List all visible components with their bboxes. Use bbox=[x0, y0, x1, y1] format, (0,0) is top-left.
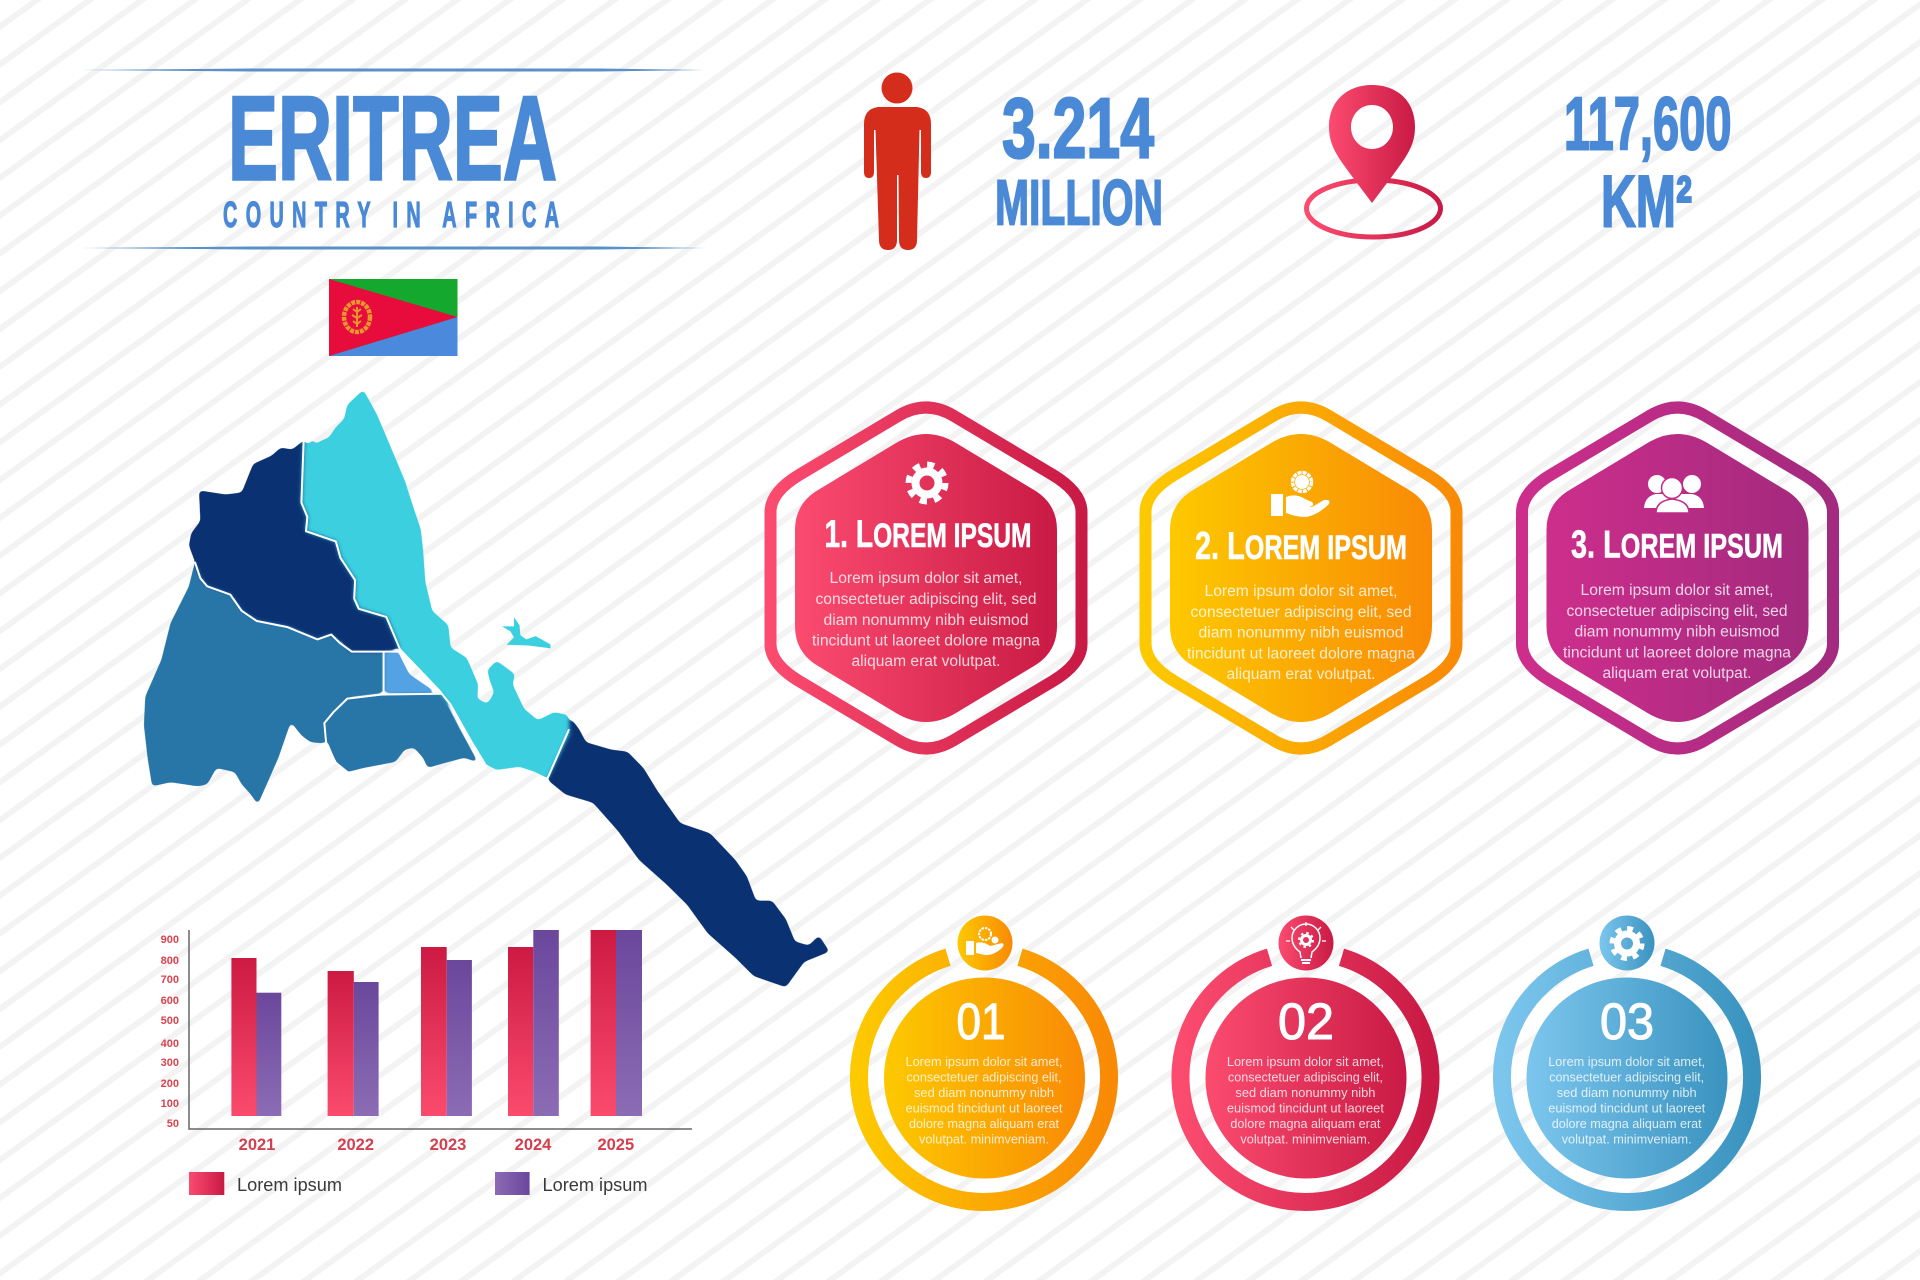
body text: dolore magna aliquam erat bbox=[1230, 1116, 1381, 1131]
body text: aliquam erat volutpat. bbox=[852, 653, 1000, 670]
body text: consectetuer adipiscing elit, bbox=[1549, 1070, 1704, 1084]
icon: light bulb bbox=[1286, 922, 1326, 963]
body text: consectetuer adipiscing elit, bbox=[906, 1070, 1062, 1084]
body text: Lorem ipsum dolor sit amet, bbox=[1227, 1054, 1384, 1069]
panel: hexagon 3 bbox=[1522, 408, 1833, 748]
y axis labels: 500 bbox=[161, 1015, 179, 1027]
region: southern red sea bbox=[548, 717, 829, 987]
body text: volutpat. minimveniam. bbox=[1240, 1132, 1370, 1146]
body text: euismod tincidunt ut laoreet bbox=[1548, 1100, 1706, 1116]
heading: Eritrea: ERITREA bbox=[228, 72, 557, 206]
y axis labels: 800 bbox=[161, 955, 179, 967]
region: gash barka bbox=[144, 562, 383, 805]
region: debub bbox=[325, 695, 478, 772]
x axis labels: 2023 bbox=[430, 1136, 466, 1154]
population stat: 3.214 bbox=[1002, 82, 1154, 176]
bar chart bbox=[161, 930, 692, 1195]
x axis labels bbox=[239, 1136, 634, 1154]
heading: 3. LOREM IPSUM bbox=[1571, 524, 1783, 567]
bars bbox=[231, 930, 642, 1116]
y axis labels bbox=[161, 934, 179, 1130]
area stat: 117,600 bbox=[1564, 82, 1732, 166]
x axis labels: 2021 bbox=[239, 1136, 275, 1154]
region: anseba bbox=[189, 440, 399, 651]
body text: diam nonummy nibh euismod bbox=[1198, 625, 1404, 642]
body text: diam nonummy nibh euismod bbox=[1574, 624, 1780, 641]
body text: diam nonummy nibh euismod bbox=[824, 612, 1028, 629]
region: island bbox=[502, 617, 551, 648]
body text: Lorem ipsum dolor sit amet, bbox=[830, 570, 1022, 587]
legend bbox=[189, 1172, 648, 1195]
map fills bbox=[144, 390, 829, 987]
icon: person bbox=[864, 72, 931, 250]
y axis labels: 900 bbox=[161, 934, 179, 946]
body text: aliquam erat volutpat. bbox=[1226, 666, 1376, 683]
x axis labels: 2025 bbox=[597, 1136, 634, 1154]
population stat bbox=[995, 82, 1163, 238]
body text: sed diam nonummy nibh bbox=[1235, 1085, 1375, 1100]
panel: hexagon 2 bbox=[1146, 408, 1456, 748]
body text: euismod tincidunt ut laoreet bbox=[906, 1100, 1063, 1116]
body text: tincidunt ut laoreet dolore magna bbox=[1563, 644, 1791, 661]
body text bbox=[812, 570, 1040, 670]
body text bbox=[1187, 583, 1415, 683]
y axis labels: 50 bbox=[167, 1118, 179, 1130]
body text bbox=[1563, 582, 1791, 682]
population stat: MILLION bbox=[995, 166, 1163, 238]
icon: map pin bbox=[1306, 85, 1440, 237]
region borders bbox=[195, 440, 569, 779]
body text: consectetuer adipiscing elit, sed bbox=[816, 591, 1036, 608]
number: 01 bbox=[956, 993, 1006, 1050]
body text: tincidunt ut laoreet dolore magna bbox=[1187, 645, 1415, 662]
body text: Lorem ipsum dolor sit amet, bbox=[1580, 582, 1774, 599]
body text: Lorem ipsum dolor sit amet, bbox=[906, 1054, 1062, 1069]
body text: euismod tincidunt ut laoreet bbox=[1227, 1100, 1384, 1116]
body text: volutpat. minimveniam. bbox=[919, 1132, 1049, 1146]
number: 02 bbox=[1278, 993, 1334, 1050]
body text: Lorem ipsum dolor sit amet, bbox=[1548, 1054, 1705, 1069]
heading: 2. LOREM IPSUM bbox=[1195, 525, 1407, 568]
icon: hand with flower bbox=[1271, 472, 1329, 517]
legend: Lorem ipsum bbox=[542, 1175, 648, 1195]
x axis labels: 2022 bbox=[337, 1136, 374, 1154]
body text: dolore magna aliquam erat bbox=[909, 1116, 1059, 1131]
y axis labels: 600 bbox=[161, 995, 179, 1007]
map of Eritrea bbox=[144, 390, 829, 987]
body text bbox=[1548, 1054, 1706, 1146]
heading: 1. LOREM IPSUM bbox=[824, 513, 1032, 556]
panel: circle 02 bbox=[1180, 916, 1430, 1202]
area stat: KM² bbox=[1601, 162, 1692, 242]
region: north red sea bbox=[301, 390, 569, 778]
body text: consectetuer adipiscing elit, sed bbox=[1190, 604, 1412, 621]
icon: gear bbox=[908, 464, 946, 502]
panel: hexagon 1 bbox=[770, 408, 1082, 748]
panel: circle 01 bbox=[859, 916, 1109, 1202]
number: 03 bbox=[1600, 993, 1654, 1050]
body text: sed diam nonummy nibh bbox=[914, 1085, 1054, 1100]
legend: Lorem ipsum bbox=[237, 1175, 342, 1195]
title block bbox=[80, 68, 705, 250]
y axis labels: 200 bbox=[161, 1078, 179, 1090]
icon: hand with gears bbox=[966, 928, 1004, 955]
y axis labels: 100 bbox=[161, 1098, 179, 1110]
body text: tincidunt ut laoreet dolore magna bbox=[812, 632, 1040, 650]
panel: circle 03 bbox=[1502, 916, 1752, 1202]
body text: consectetuer adipiscing elit, sed bbox=[1566, 603, 1788, 620]
subheading: COUNTRY IN AFRICA bbox=[223, 196, 559, 236]
icon: people bbox=[1644, 475, 1704, 513]
body text: Lorem ipsum dolor sit amet, bbox=[1204, 583, 1398, 600]
body text bbox=[1227, 1054, 1384, 1146]
body text: volutpat. minimveniam. bbox=[1562, 1132, 1692, 1146]
area stat bbox=[1564, 82, 1732, 242]
body text: consectetuer adipiscing elit, bbox=[1228, 1070, 1383, 1084]
y axis labels: 700 bbox=[161, 974, 179, 986]
y axis labels: 400 bbox=[161, 1038, 179, 1050]
icon: gear bbox=[1612, 928, 1642, 958]
icon: flag of Eritrea bbox=[329, 279, 458, 356]
y axis labels: 300 bbox=[161, 1057, 179, 1069]
body text: dolore magna aliquam erat bbox=[1552, 1116, 1702, 1131]
body text: sed diam nonummy nibh bbox=[1557, 1085, 1697, 1100]
region: maekel bbox=[385, 652, 436, 692]
x axis labels: 2024 bbox=[515, 1136, 552, 1154]
body text bbox=[906, 1054, 1063, 1146]
body text: aliquam erat volutpat. bbox=[1602, 665, 1752, 682]
